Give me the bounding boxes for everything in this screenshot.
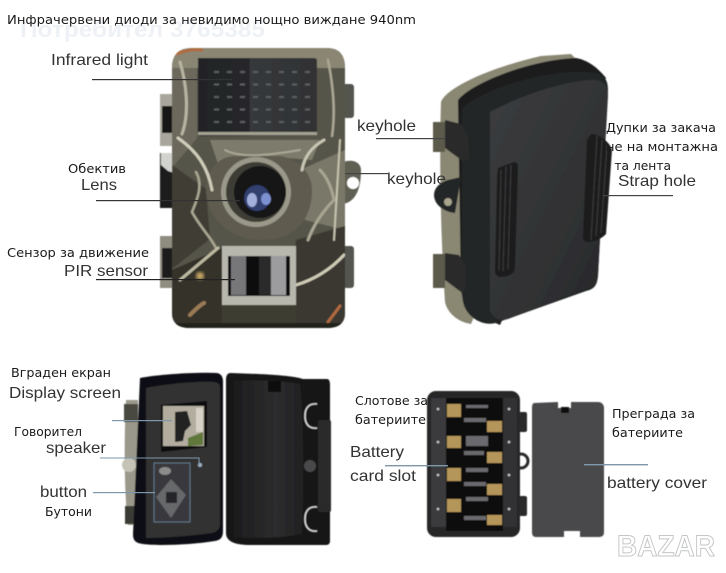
rear shell xyxy=(226,373,330,545)
label: battery slot: Слотове за xyxy=(355,394,428,408)
label: infrared light: Infrared light xyxy=(51,52,149,69)
label: battery cover xyxy=(584,407,708,492)
label: speaker: Говорител xyxy=(14,425,82,439)
black back shell xyxy=(462,72,608,324)
label: display screen xyxy=(9,366,172,421)
right clips xyxy=(343,84,361,288)
label: strap hole xyxy=(603,121,718,196)
camera front view xyxy=(160,48,361,328)
speaker hole xyxy=(198,463,202,467)
strap loop rings xyxy=(305,404,317,531)
title: infrared diodes: Инфрачервени диоди за невидимо нощно виждане 940nm xyxy=(7,13,416,27)
label: battery slot xyxy=(350,394,448,485)
label: PIR sensor: Сензор за движение xyxy=(7,246,149,260)
PIR sensor window xyxy=(222,246,296,305)
label: strap hole: не на монтажна xyxy=(606,140,718,154)
batteries xyxy=(447,404,502,525)
label: speaker: speaker xyxy=(46,440,107,457)
label: PIR sensor: PIR sensor xyxy=(64,263,149,280)
label: lens: Lens xyxy=(81,177,117,194)
label: PIR sensor xyxy=(7,246,235,280)
top shell lip xyxy=(458,58,606,325)
label: battery cover: батериите xyxy=(612,426,683,440)
label: display screen: Вграден екран xyxy=(11,366,111,380)
label: battery slot: card slot xyxy=(350,468,417,485)
camo edge xyxy=(440,54,581,324)
display screen xyxy=(161,401,207,452)
label: keyhole middle xyxy=(345,171,446,188)
watermark: user id: Потребител 3765385 xyxy=(20,17,265,42)
label: strap hole: - та лента xyxy=(606,159,671,173)
label: button xyxy=(40,484,155,519)
label: strap hole: Strap hole xyxy=(618,173,696,190)
label: button: Бутони xyxy=(45,505,92,519)
battery compartment xyxy=(427,391,528,537)
watermark: Bazar logo: BAZAR xyxy=(617,530,715,563)
left clips xyxy=(160,94,174,288)
label: battery slot: Battery xyxy=(350,444,404,461)
label: battery cover: Преграда за xyxy=(612,407,695,421)
back face xyxy=(490,80,608,320)
label: keyhole top xyxy=(357,118,445,139)
label: lens xyxy=(68,162,240,201)
left side hinges xyxy=(122,400,139,525)
camera back view xyxy=(433,54,612,325)
door xyxy=(133,373,223,545)
camo body xyxy=(172,48,345,328)
battery cover xyxy=(532,402,604,537)
lens xyxy=(221,157,291,227)
label: battery slot: батериите xyxy=(355,413,426,427)
label: keyhole top: keyhole xyxy=(357,118,416,135)
IR LED panel xyxy=(198,58,317,136)
camera open, door and rear shell xyxy=(122,373,331,545)
keypad xyxy=(154,463,190,522)
label: strap hole: Дупки за закача xyxy=(606,121,716,135)
label: battery cover: battery cover xyxy=(607,475,708,492)
side tabs and mounting ear xyxy=(433,120,469,292)
strap loops xyxy=(495,134,612,277)
label: keyhole middle: keyhole xyxy=(387,171,446,188)
label: speaker xyxy=(14,425,199,465)
label: lens: Обектив xyxy=(68,162,126,176)
label: button: button xyxy=(40,484,87,501)
label: display screen: Display screen xyxy=(9,385,121,402)
